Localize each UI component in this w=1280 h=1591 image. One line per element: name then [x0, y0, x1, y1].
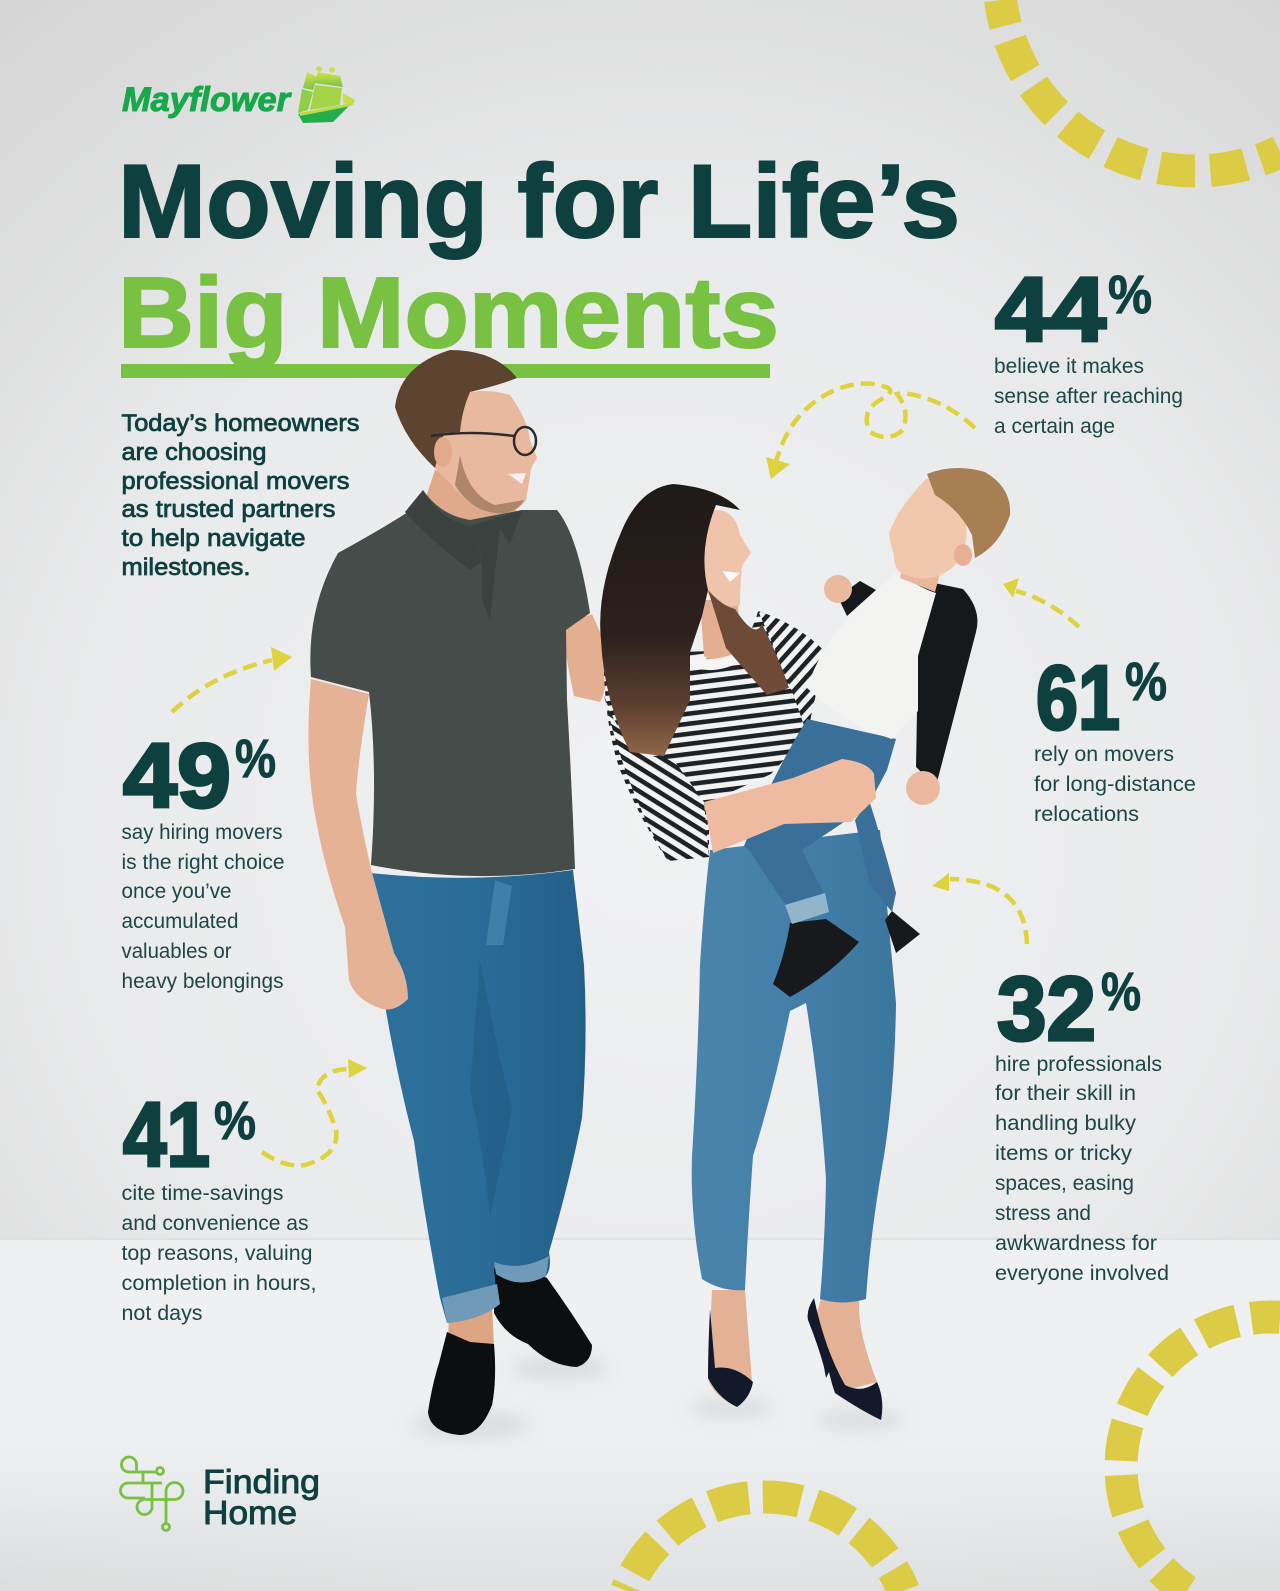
man face: [427, 391, 537, 513]
Finding Home logo: Finding: [203, 1463, 320, 1500]
child jeans: [744, 719, 896, 909]
Finding Home logo: [121, 1457, 320, 1531]
stat: 44 percent: sense after reaching: [994, 385, 1183, 408]
stat: 44 percent: a certain age: [994, 415, 1115, 438]
woman far sleeve stripes: [758, 611, 825, 735]
photo: man: [308, 350, 611, 1435]
stat: 41 percent: [122, 1085, 316, 1325]
child ear: [954, 544, 972, 566]
child hair: [927, 468, 1010, 558]
man back shoe: [494, 1263, 592, 1367]
woman forearm and hand over child: [704, 759, 876, 853]
stat: 41 percent: top reasons, valuing: [122, 1242, 312, 1265]
man shirt collar and placket: [405, 490, 522, 620]
Mayflower logo: [122, 66, 355, 123]
intro text: milestones.: [122, 554, 250, 581]
child white shirt: [807, 573, 936, 739]
woman hair right strand: [708, 590, 789, 695]
stat: 49 percent: accumulated: [122, 910, 238, 933]
man jeans fly: [486, 880, 512, 945]
stat: 49 percent: say hiring movers: [122, 821, 282, 844]
woman neck trim: [682, 648, 746, 670]
stat: 32 percent: awkwardness for: [995, 1232, 1157, 1255]
decorative dashed ring: bottom centre: [626, 1497, 904, 1591]
arrow: to the family, 32 percent: [932, 873, 1027, 944]
title: [118, 144, 960, 369]
man hair: [395, 350, 517, 468]
child far shoe: [885, 911, 920, 953]
child cuff: [838, 581, 876, 616]
woman striped sleeve: [604, 695, 709, 861]
stat: 49 percent: %: [235, 729, 276, 789]
stat: 41 percent: and convenience as: [122, 1212, 308, 1235]
icon: ship: [298, 66, 355, 123]
intro text: to help navigate: [122, 525, 306, 552]
man beard: [455, 455, 524, 513]
photo: child: [744, 468, 1010, 997]
man shirt: [310, 490, 590, 876]
stat: 41 percent: %: [214, 1091, 256, 1151]
man glasses: [431, 427, 536, 455]
stat: 61 percent: 61: [1036, 648, 1120, 749]
stat: 44 percent: [994, 260, 1183, 438]
stat: 32 percent: items or tricky: [995, 1142, 1133, 1165]
arrow: to the man, 41 percent: [262, 1059, 367, 1165]
stat: 49 percent: heavy belongings: [122, 970, 284, 993]
stat: 61 percent: %: [1125, 652, 1167, 712]
stat: 61 percent: for long-distance: [1034, 773, 1196, 796]
woman right heel: [815, 1295, 877, 1393]
woman smile: [722, 571, 740, 582]
woman neck: [700, 600, 740, 662]
man front ankle: [448, 1305, 494, 1346]
stat: 49 percent: [122, 726, 284, 993]
stat: 41 percent: not days: [122, 1302, 202, 1325]
intro text: professional movers: [122, 468, 350, 495]
man jeans inseam shadow: [470, 960, 512, 1217]
title underline: [121, 364, 770, 378]
stat: 32 percent: spaces, easing: [995, 1172, 1134, 1195]
man arm and hand: [308, 679, 408, 1010]
stat: 49 percent: 49: [123, 726, 231, 827]
stat: 32 percent: %: [1101, 962, 1141, 1022]
stat: 44 percent: 44: [995, 260, 1106, 361]
child sleeve far: [896, 575, 977, 786]
child jeans cuff: [785, 893, 829, 924]
arrow: to the child, 61 percent: [1003, 578, 1079, 627]
man mouth: [508, 473, 526, 484]
stat: 44 percent: %: [1108, 265, 1152, 325]
stat: 32 percent: [995, 959, 1169, 1285]
photo: woman: [600, 484, 896, 1420]
man ear: [434, 437, 452, 467]
woman left heel: [708, 1290, 752, 1407]
man jeans: [371, 870, 586, 1323]
stat: 44 percent: believe it makes: [994, 355, 1144, 378]
stat: 61 percent: [1034, 648, 1196, 826]
woman jeans: [692, 830, 896, 1302]
child raised hand: [824, 575, 852, 603]
floor shadows under the family: [410, 1356, 906, 1439]
intro text: as trusted partners: [122, 496, 336, 523]
stat: 49 percent: is the right choice: [122, 851, 284, 874]
child face: [889, 478, 966, 578]
arrow: to the child, 44 percent: [766, 383, 975, 479]
stat: 41 percent: completion in hours,: [122, 1272, 316, 1295]
intro text: [122, 410, 360, 581]
stat: 32 percent: everyone involved: [995, 1262, 1169, 1285]
Finding Home logo: Home: [203, 1494, 297, 1531]
man jeans cuffs: [442, 1256, 549, 1323]
stat: 49 percent: once you’ve: [122, 880, 232, 903]
Mayflower logo: Mayflower: [122, 81, 292, 119]
man far arm: [562, 614, 611, 702]
child neck: [900, 555, 945, 592]
intro text: are choosing: [122, 439, 266, 466]
stat: 32 percent: hire professionals: [995, 1053, 1162, 1076]
man front shoe: [428, 1332, 495, 1435]
stat: 61 percent: rely on movers: [1034, 743, 1174, 766]
stat: 41 percent: cite time-savings: [122, 1182, 284, 1205]
heading line one: Moving for Life’s: [118, 144, 960, 260]
child near shoe: [773, 919, 859, 997]
woman hair main: [600, 484, 740, 756]
child far leg: [855, 800, 896, 912]
decorative dashed ring: bottom right: [1121, 1317, 1280, 1591]
woman striped top: [604, 611, 825, 861]
stat: 32 percent: for their skill in: [995, 1082, 1136, 1105]
man neck: [425, 470, 520, 525]
stat: 49 percent: valuables or: [122, 940, 232, 963]
woman face: [702, 510, 751, 606]
arrow: to the man, 49 percent: [172, 647, 292, 712]
icon: route knot: [121, 1457, 183, 1530]
intro text: Today’s homeowners: [122, 410, 360, 437]
stat: 41 percent: 41: [123, 1085, 210, 1186]
child lower hand: [906, 771, 940, 805]
heading line two: Big Moments: [118, 257, 779, 369]
stat: 32 percent: stress and: [995, 1202, 1091, 1225]
decorative dashed ring: top right: [1001, 0, 1280, 171]
stat: 32 percent: handling bulky: [995, 1112, 1137, 1135]
stat: 61 percent: relocations: [1034, 803, 1139, 826]
stat: 32 percent: 32: [997, 959, 1096, 1060]
